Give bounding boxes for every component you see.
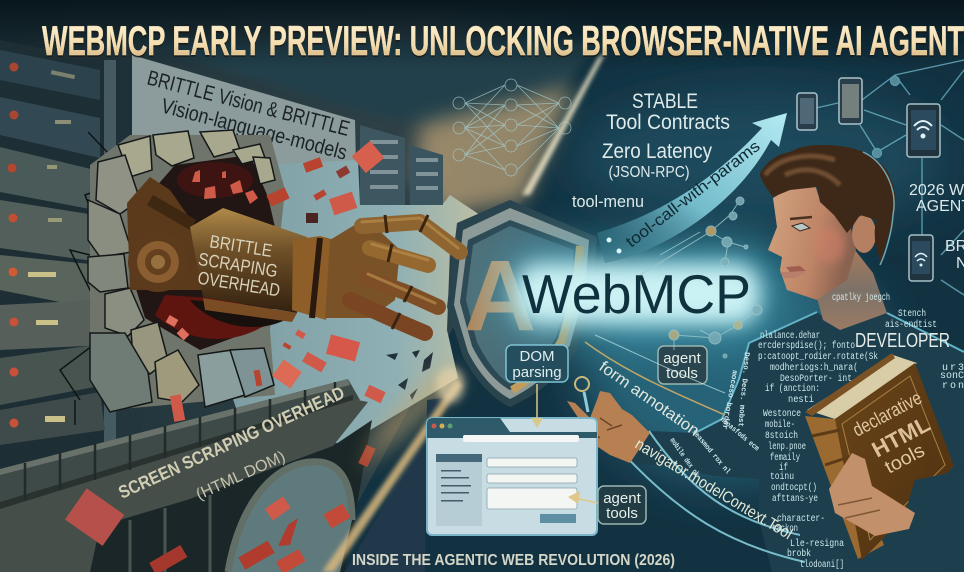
code on sweater: tackon (772, 523, 798, 535)
hand holding book (829, 453, 964, 572)
browser window (427, 418, 597, 535)
footer caption: INSIDE THE AGENTIC WEB REVOLUTION (2026) (352, 552, 675, 569)
code on sweater: modheriogs:h_nara( (770, 362, 858, 374)
code on sweater: if (anction: (765, 383, 820, 395)
hair (760, 145, 895, 263)
stones around the breach (88, 130, 275, 412)
elbow joint (127, 177, 297, 327)
device network (797, 60, 964, 295)
breach in the wall (90, 135, 285, 410)
icon: phone 2 (839, 78, 862, 124)
code on sweater: ercderspdise(); fonto (758, 340, 855, 352)
code on sweater: Deso. Decs. mobst (735, 352, 750, 427)
book: declarative HTML tools: tools (881, 440, 928, 478)
right heading labels: Tool Contracts (606, 111, 730, 134)
code on sweater: tlodoani[] (800, 559, 844, 571)
code on sweater: ur3 (942, 363, 964, 374)
arm text: SCRAPING (197, 249, 279, 281)
arrow: tool-call-with-params (597, 113, 787, 263)
curved form annotation text: form annotation (596, 358, 702, 440)
code on sweater: DesoPorter- int (780, 373, 852, 385)
bridge with railing: SCREEN SCRAPING OVERHEAD (115, 382, 348, 503)
code on sweater: brobk (787, 548, 811, 560)
bridge with railing (0, 379, 372, 572)
code on sweater (668, 292, 964, 571)
right heading labels: Zero Latency (602, 140, 712, 163)
sweater (629, 312, 964, 572)
code on sweater: femaily (770, 452, 800, 464)
code on sweater: ais-endtist (885, 319, 937, 331)
left panel: server racks (0, 40, 132, 572)
code on sweater: moceso border (720, 369, 738, 430)
book: declarative HTML tools (805, 353, 954, 560)
code on sweater: nlalance.dehar (760, 330, 820, 342)
small node network near wordmark (669, 305, 762, 358)
code on sweater: mobile dex ok (668, 437, 700, 479)
code on sweater: ron (942, 381, 964, 392)
book: declarative HTML tools: declarative (849, 388, 926, 441)
curved form annotation text (585, 335, 725, 440)
bridge with railing: (HTML DOM) (194, 448, 288, 504)
arrow: tool-call-with-params: tool-call-with-params (623, 138, 764, 251)
icon: wifi phone 3 (907, 104, 940, 157)
code on sweater: mobile- (765, 419, 795, 431)
book: declarative HTML tools: HTML (868, 411, 934, 462)
code on sweater: Westonce (763, 409, 801, 420)
code on sweater: lenp.pnoe (768, 441, 806, 453)
network labels (909, 182, 964, 272)
code on sweater: nesti (788, 394, 814, 406)
code on sweater: 8stoich (765, 430, 798, 442)
icon: wifi phone 4 (909, 235, 933, 281)
right heading labels (572, 90, 730, 211)
code on sweater: character- (777, 513, 825, 525)
reaching hand (567, 377, 650, 463)
neural network icon (453, 79, 571, 176)
face (768, 185, 856, 300)
developer figure (620, 145, 964, 572)
code on sweater: afttans-ye (772, 493, 818, 505)
code on sweater: ondtocpt() (771, 482, 817, 494)
label: DOM parsing: parsing (512, 364, 562, 381)
forearm (190, 208, 307, 313)
code on sweater: Stench (898, 308, 926, 320)
arm text: BRITTLE (208, 231, 274, 261)
code on sweater: seasmod rox nl (690, 429, 731, 476)
neck (817, 250, 887, 330)
label: agent tools lower: tools (606, 505, 638, 522)
code on sweater: cpatlky joegch (832, 292, 890, 304)
icon: phone 1 (797, 93, 817, 130)
right heading labels: (JSON-RPC) (608, 164, 690, 181)
shield emblem (447, 200, 597, 407)
label: DOM parsing (506, 345, 568, 382)
code on sweater: sonC (940, 371, 964, 382)
WebMCP wordmark: WebMCP (522, 263, 751, 325)
arm text: OVERHEAD (196, 268, 281, 300)
ear (852, 215, 876, 253)
shield letter A: A (464, 240, 536, 352)
panel: cracked wall plate: BRITTLE Vision & BRITTLE (145, 67, 352, 141)
code on sweater: nooasfods ecm (718, 416, 760, 453)
label: agent tools lower (598, 486, 646, 524)
arrow: agent tools to field (568, 491, 598, 504)
panel: cracked wall plate: Vision-language-models (159, 95, 349, 165)
arm text (196, 231, 281, 300)
dark debris shards (386, 350, 433, 400)
small node network near arrow (640, 197, 748, 275)
label: agent tools upper: tools (666, 365, 698, 382)
right heading labels: STABLE (632, 90, 698, 113)
right heading labels: tool-menu (572, 192, 644, 211)
label: agent tools lower: agent (603, 490, 642, 507)
palm (325, 218, 400, 318)
code on sweater: Lle-resigna (790, 538, 844, 550)
WebMCP wordmark (505, 250, 770, 335)
flying red code fragments (65, 141, 386, 572)
robotic arm (127, 177, 460, 333)
fingers (350, 218, 460, 333)
code on sweater: if (779, 462, 788, 474)
code on sweater: toinu (770, 471, 794, 483)
cuff (292, 236, 335, 320)
label: agent tools upper: agent (663, 350, 702, 367)
label: DOM parsing: DOM (520, 348, 554, 365)
label: agent tools upper (658, 346, 707, 384)
panel: cracked wall plate (116, 55, 480, 445)
code on sweater: stack.x ok mod (922, 479, 939, 530)
code on sweater: p:catoopt_rodier.rotate(Sk (758, 351, 878, 363)
arrow: DOM parsing to browser (531, 384, 543, 428)
golden light ray divider (322, 52, 606, 572)
curved API text: navigator.modelContext.Tool (632, 436, 795, 543)
